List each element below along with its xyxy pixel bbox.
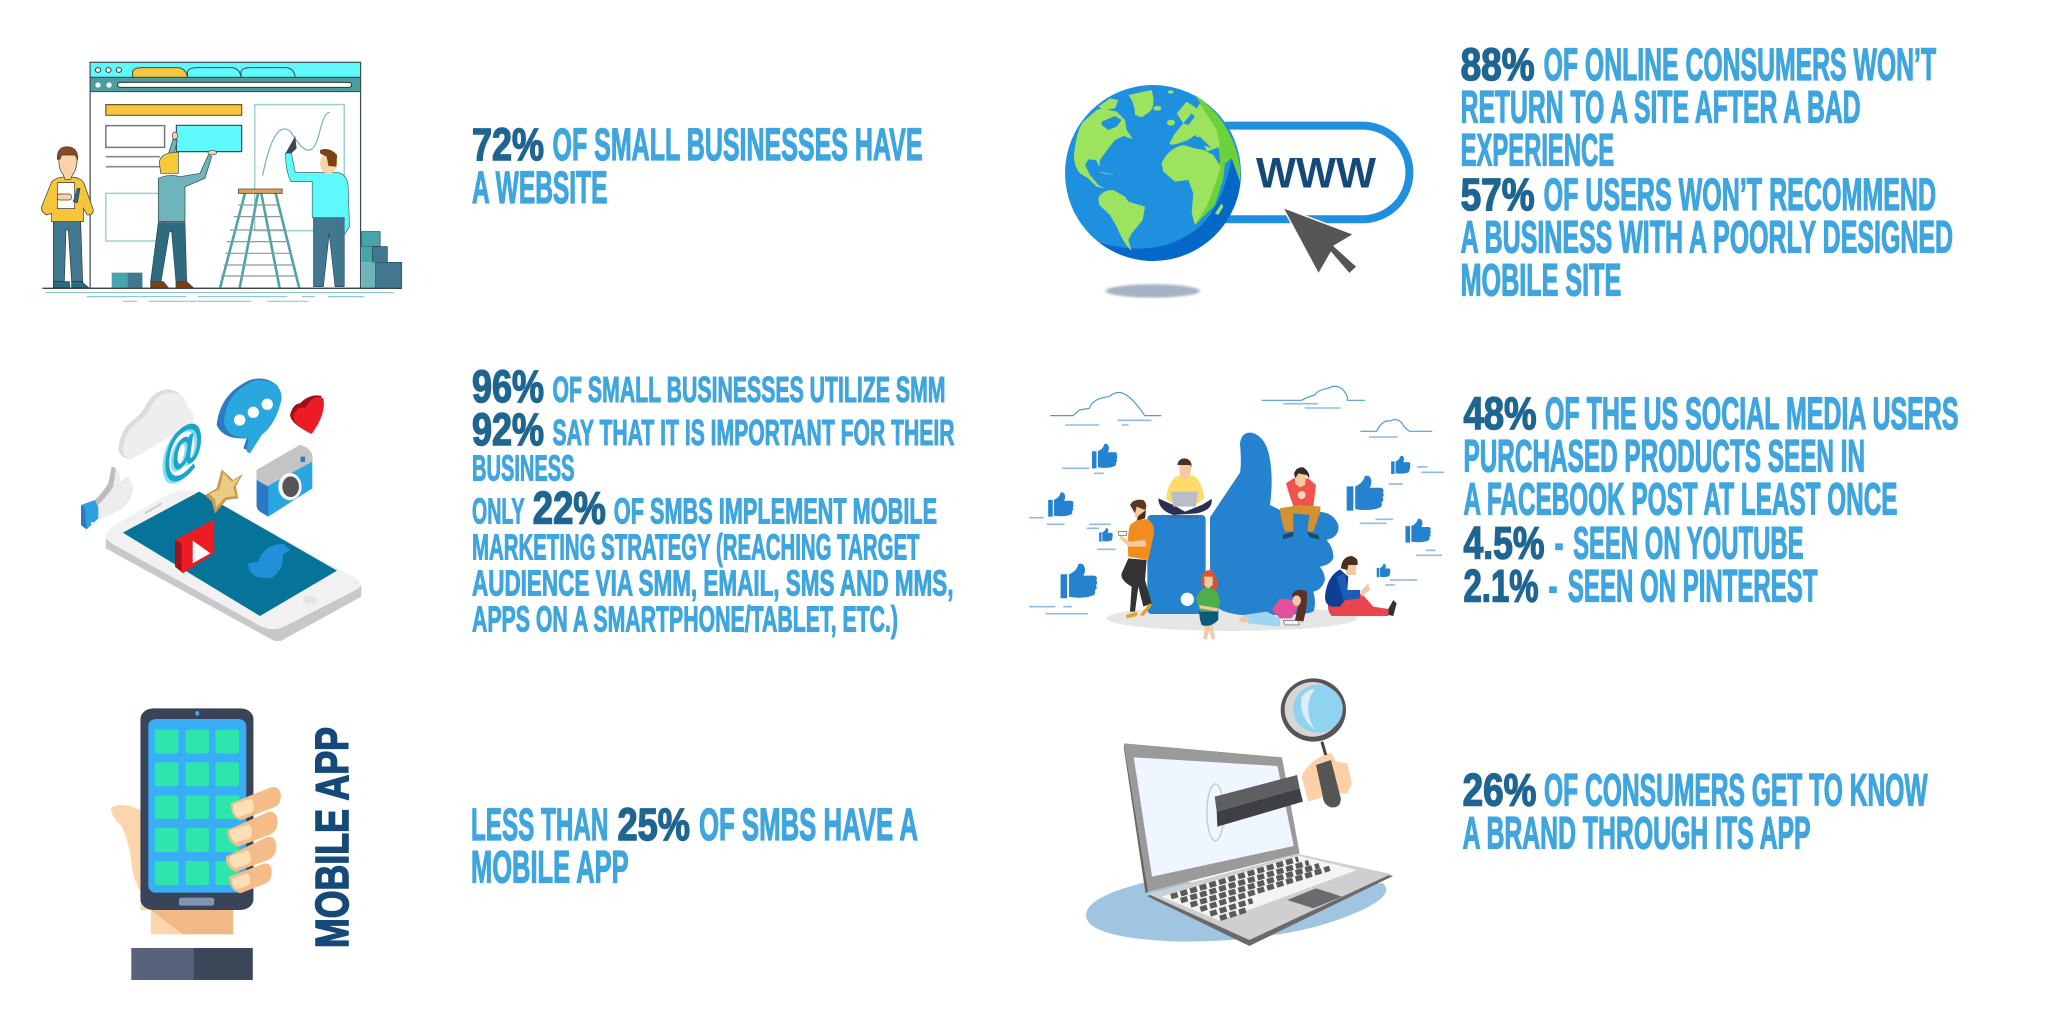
portal ring on screen — [1207, 784, 1224, 841]
text: 88% and 57% statistics: 88% — [1461, 39, 1535, 90]
small thumbs up icons — [1048, 444, 1431, 598]
text: 96%, 92% and 22% statistics: 92% — [472, 404, 544, 455]
globe — [1065, 85, 1241, 261]
smartphone — [106, 490, 361, 641]
video play icon — [175, 519, 214, 573]
text: 96%, 92% and 22% statistics: ONLY — [472, 490, 524, 531]
text: 48%, 4.5% and 2.1% statistics: 4.5% — [1464, 518, 1544, 569]
illustration: smartphone with social icons — [81, 378, 361, 641]
heart icon — [290, 395, 324, 434]
browser window — [90, 62, 361, 288]
text: 96%, 92% and 22% statistics — [472, 361, 954, 640]
camera icon — [257, 445, 312, 517]
sleeve cuff — [131, 948, 253, 980]
text: 96%, 92% and 22% statistics: APPS ON A SMARTPHONE/TABLET, ETC.) — [472, 599, 898, 640]
text: less than 25% of SMBs have a mobile app: MOBILE APP — [471, 842, 629, 893]
text: 96%, 92% and 22% statistics: BUSINESS — [472, 447, 574, 488]
man in blue hoodie — [1325, 556, 1397, 616]
email at icon: @ — [161, 408, 200, 495]
giant thumbs up — [1147, 433, 1338, 615]
illustration: globe with www address bar and cursor — [1065, 85, 1409, 298]
text: 88% and 57% statistics: 57% — [1461, 169, 1535, 220]
text: 48%, 4.5% and 2.1% statistics: SEEN ON YOUTUBE — [1573, 518, 1804, 569]
panel: website statistic — [42, 62, 923, 301]
text: 96%, 92% and 22% statistics: SAY THAT IT IS IMPORTANT FOR THEIR — [552, 412, 954, 453]
panel: website experience statistic — [1065, 39, 1953, 306]
text: 96%, 92% and 22% statistics: AUDIENCE VIA SMM, EMAIL, SMS AND MMS, — [472, 563, 954, 604]
man with orange shirt — [1119, 500, 1154, 618]
speech bubble icon — [217, 378, 282, 453]
woman in green top — [1196, 570, 1220, 639]
hand with magnifying glass — [1281, 678, 1352, 807]
phone — [140, 708, 253, 910]
fingers — [226, 787, 281, 893]
woman reaching up — [151, 132, 217, 288]
illustration: team building a website — [42, 62, 402, 301]
www label: WWW — [1256, 150, 1376, 198]
sleeve — [1215, 775, 1303, 827]
text: 48%, 4.5% and 2.1% statistics: 2.1% — [1464, 561, 1538, 612]
hand palm — [111, 805, 233, 934]
text: less than 25% of SMBs have a mobile app: 25% — [618, 799, 690, 850]
text: 26% of consumers get to know a brand through its app — [1463, 764, 1928, 858]
text: 96%, 92% and 22% statistics: OF SMALL BUSINESSES UTILIZE SMM — [552, 369, 946, 410]
text: less than 25% of SMBs have a mobile app: OF SMBS HAVE A — [699, 799, 918, 850]
person in red shirt — [1280, 467, 1321, 539]
cloud icon — [118, 389, 194, 459]
man with laptop on top — [1158, 458, 1212, 518]
text: 88% and 57% statistics — [1461, 39, 1953, 306]
thumbs up icon — [81, 467, 133, 529]
text: 48%, 4.5% and 2.1% statistics: SEEN ON PINTEREST — [1568, 561, 1818, 612]
text: 96%, 92% and 22% statistics: 22% — [533, 482, 606, 533]
text: 72% of small businesses have a website: A WEBSITE — [472, 162, 608, 213]
text: 72% of small businesses have a website: OF SMALL BUSINESSES HAVE — [552, 119, 922, 170]
ladder — [220, 189, 299, 288]
panel: mobile app adoption statistic — [111, 708, 918, 980]
text: 26% of consumers get to know a brand through its app: 26% — [1463, 764, 1536, 815]
ground shadow — [1107, 606, 1357, 631]
text: 88% and 57% statistics: MOBILE SITE — [1461, 255, 1621, 306]
bird icon — [248, 544, 290, 578]
text: 96%, 92% and 22% statistics: OF SMBS IMPLEMENT MOBILE — [614, 490, 937, 531]
text: 48%, 4.5% and 2.1% statistics: - — [1548, 561, 1558, 612]
panel: brand discovery statistic — [1086, 678, 1928, 946]
text: 48%, 4.5% and 2.1% statistics: - — [1554, 518, 1564, 569]
text: 48%, 4.5% and 2.1% statistics: 48% — [1464, 388, 1536, 439]
label: mobile app vertical: MOBILE APP — [306, 727, 358, 948]
panel: social media purchase statistic — [1029, 386, 1958, 639]
woman lying down — [1239, 590, 1307, 627]
text: 96%, 92% and 22% statistics: MARKETING STRATEGY (REACHING TARGET — [472, 526, 920, 567]
star icon — [205, 469, 243, 513]
text: 72% of small businesses have a website: 72% — [472, 119, 544, 170]
text: 72% of small businesses have a website — [472, 119, 922, 213]
globe shadow — [1106, 284, 1200, 298]
text: less than 25% of SMBs have a mobile app: LESS THAN — [471, 799, 608, 850]
text: 48%, 4.5% and 2.1% statistics — [1464, 388, 1958, 612]
ground lines — [42, 288, 402, 301]
laptop — [1124, 743, 1393, 946]
panel: social media marketing statistic — [81, 361, 954, 641]
cursor — [1283, 207, 1357, 274]
illustration: people around a giant thumbs up — [1029, 386, 1444, 639]
text: less than 25% of SMBs have a mobile app — [471, 799, 918, 893]
illustration: laptop with hand and magnifying glass — [1086, 678, 1393, 946]
man drawing on the board — [285, 136, 349, 287]
illustration: hand holding a phone — [111, 708, 281, 980]
email at icon: @ — [163, 406, 203, 493]
blue shadow ellipse — [1086, 882, 1386, 942]
address pill — [1181, 126, 1409, 219]
stacked boxes — [112, 232, 402, 288]
text: 96%, 92% and 22% statistics: 96% — [472, 361, 544, 412]
text: 88% and 57% statistics: EXPERIENCE — [1461, 125, 1614, 176]
man with notepad — [42, 147, 93, 288]
clouds — [1029, 386, 1444, 614]
